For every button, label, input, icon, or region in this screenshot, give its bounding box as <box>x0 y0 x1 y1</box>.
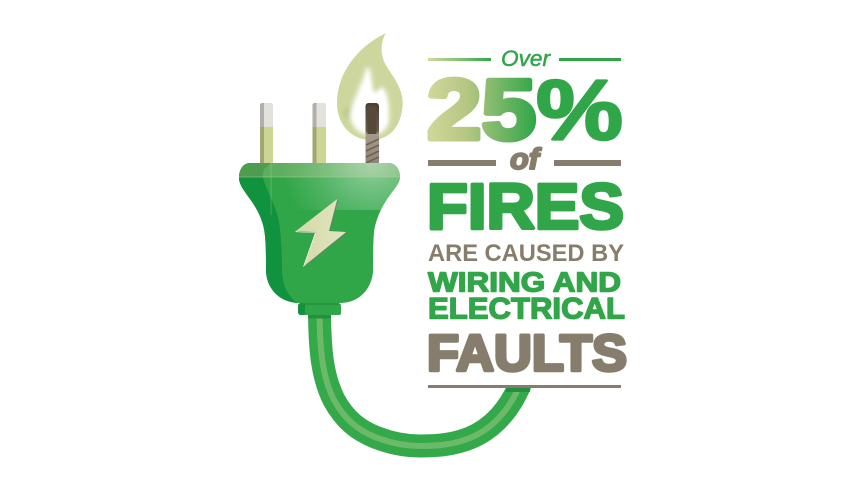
cap highlight <box>239 163 400 215</box>
electrical: ELECTRICAL <box>428 292 625 325</box>
over line: Over <box>501 46 552 71</box>
body shadow <box>239 163 298 303</box>
25% figure: % <box>536 64 623 158</box>
cord <box>308 314 530 446</box>
wiring and: WIRING AND <box>428 266 621 297</box>
25% figure <box>427 63 623 158</box>
of line: of <box>510 143 542 176</box>
icon: lightning bolt <box>295 199 347 267</box>
plug body <box>238 163 400 315</box>
25% figure: 25 <box>427 63 536 158</box>
bottom rule <box>428 385 621 388</box>
illustration: electric plug <box>239 33 530 446</box>
of line <box>428 143 621 176</box>
headline text block <box>427 46 627 388</box>
FIRES: FIRES <box>427 170 624 242</box>
infographic <box>238 33 627 458</box>
prong left <box>260 103 273 165</box>
prong right: glowing pin <box>366 103 379 165</box>
are caused by: ARE CAUSED BY <box>428 240 624 267</box>
flame <box>337 33 403 140</box>
prong middle <box>312 103 326 165</box>
over line <box>428 46 621 71</box>
FAULTS: FAULTS <box>427 324 627 382</box>
collar <box>298 303 341 315</box>
